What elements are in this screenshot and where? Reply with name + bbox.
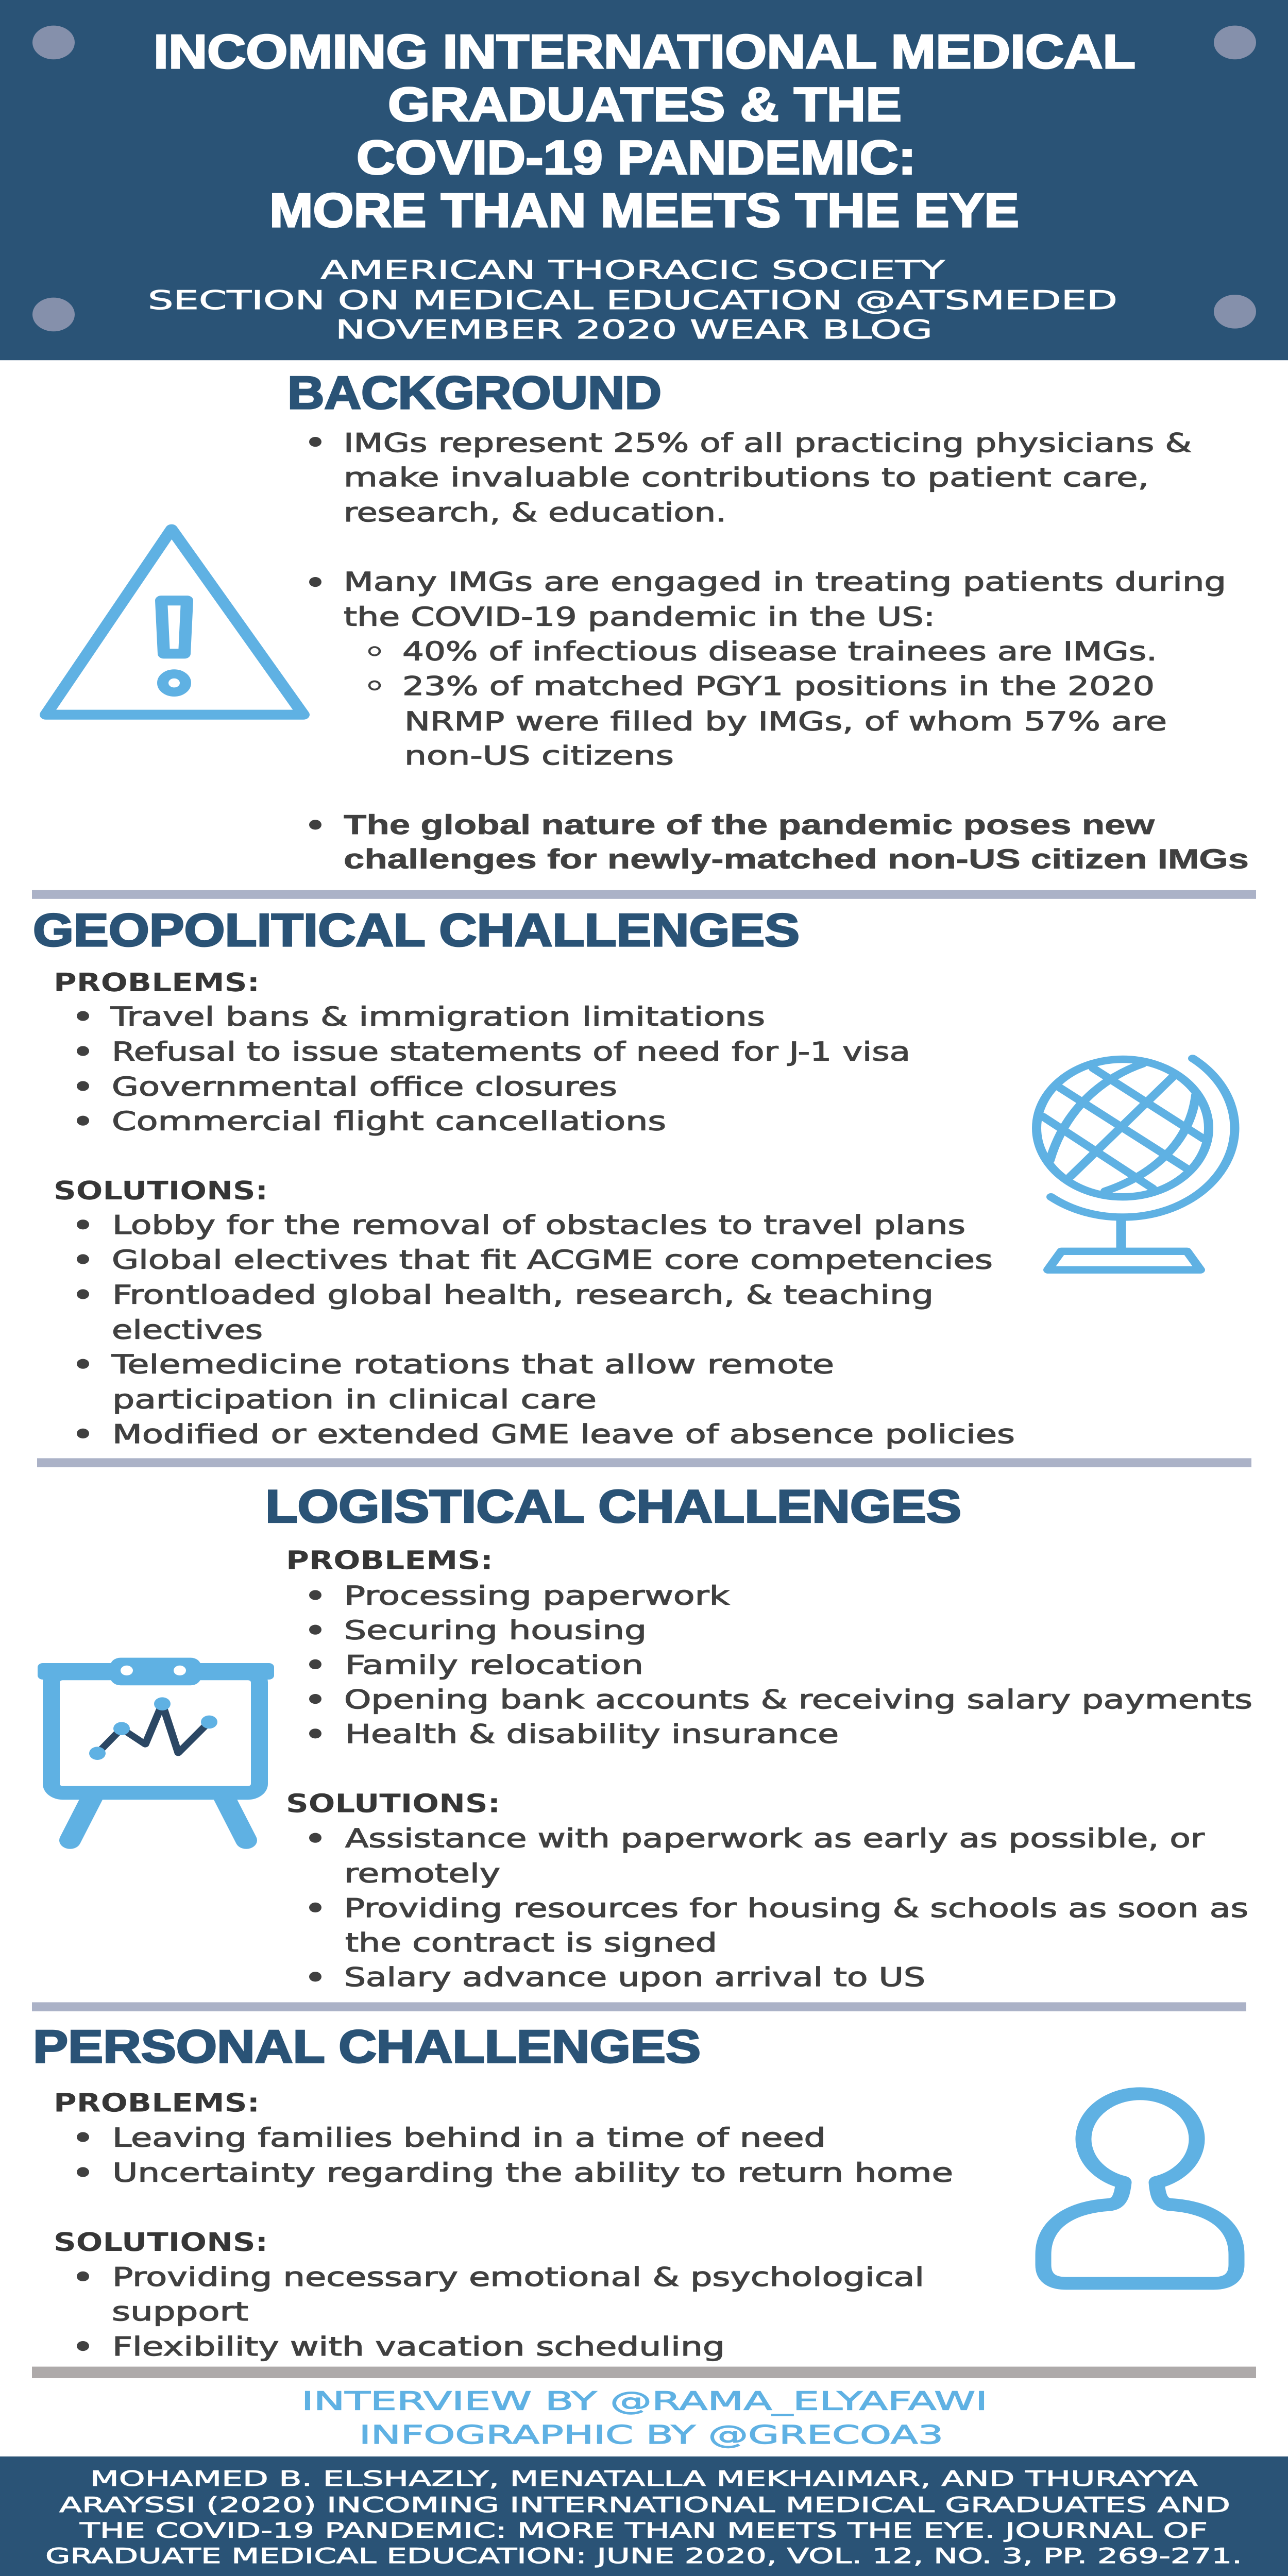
title: INCOMING INTERNATIONAL MEDICAL (154, 25, 1136, 78)
solutions list: Lobby for the removal of obstacles to travel plans (112, 1210, 965, 1240)
solutions list: Modified or extended GME leave of absence policies (112, 1419, 1015, 1449)
solutions list: SOLUTIONS: (54, 2227, 268, 2257)
solutions list: the contract is signed (345, 1928, 717, 1958)
heading: personal challenges: PERSONAL CHALLENGES (33, 2021, 701, 2072)
citation text: MOHAMED B. ELSHAZLY, MENATALLA MEKHAIMAR, AND THURAYYA (90, 2467, 1198, 2491)
problems list: Refusal to issue statements of need for J-1 visa (112, 1037, 910, 1066)
problems list: Leaving families behind in a time of need (112, 2123, 826, 2153)
solutions list (286, 1788, 1248, 1992)
text block: IMGs treating COVID-19 patients: the COVID-19 pandemic in the US: (344, 602, 935, 632)
solutions list: Providing necessary emotional & psychological (112, 2262, 924, 2292)
problems list: PROBLEMS: (54, 2088, 260, 2117)
problems list: Uncertainty regarding the ability to return home (112, 2158, 953, 2188)
solutions list: remotely (344, 1858, 500, 1889)
title: MORE THAN MEETS THE EYE (269, 183, 1019, 237)
icon: presentation board with line chart (38, 1658, 274, 1840)
problems list: PROBLEMS: (286, 1545, 493, 1575)
solutions list: Frontloaded global health, research, & teaching (112, 1280, 934, 1310)
text block: global nature of the pandemic: challenges for newly-matched non-US citizen IMGs (344, 844, 1249, 875)
solutions list (54, 2227, 924, 2362)
subtitle: NOVEMBER 2020 WEAR BLOG (335, 314, 933, 345)
heading: geopolitical challenges: GEOPOLITICAL CHALLENGES (33, 904, 800, 956)
subtitle (148, 255, 1117, 345)
solutions list: support (112, 2297, 248, 2327)
text block: IMGs treating COVID-19 patients: 40% of infectious disease trainees are IMGs. (402, 636, 1157, 667)
citation text: ARAYSSI (2020) INCOMING INTERNATIONAL MEDICAL GRADUATES AND (59, 2493, 1230, 2517)
text block: IMGs treating COVID-19 patients: non-US citizens (404, 741, 674, 771)
text block: IMGs treating COVID-19 patients: Many IMGs are engaged in treating patients during (344, 567, 1226, 597)
problems list: Governmental office closures (112, 1072, 617, 1101)
heading: logistical challenges: LOGISTICAL CHALLENGES (265, 1481, 961, 1532)
problems list: Securing housing (344, 1615, 647, 1646)
credits: INTERVIEW BY @RAMA_ELYAFAWI (301, 2386, 988, 2416)
subtitle: AMERICAN THORACIC SOCIETY (320, 255, 945, 285)
solutions list: Salary advance upon arrival to US (344, 1962, 925, 1992)
text block: IMG share of physicians: make invaluable contributions to patient care, (344, 463, 1149, 493)
subtitle: SECTION ON MEDICAL EDUCATION @ATSMEDED (148, 285, 1117, 315)
text block: IMGs treating COVID-19 patients: 23% of matched PGY1 positions in the 2020 (402, 671, 1155, 701)
panel: header banner (0, 0, 1288, 360)
title: GRADUATES & THE (388, 77, 902, 131)
heading: background: BACKGROUND (287, 367, 662, 418)
text block: IMG share of physicians (309, 428, 1192, 528)
problems list (54, 968, 910, 1137)
problems list: Processing paperwork (344, 1581, 730, 1611)
solutions list: Telemedicine rotations that allow remote (111, 1349, 834, 1380)
credits: INFOGRAPHIC BY @GRECOA3 (359, 2420, 943, 2450)
title: COVID-19 PANDEMIC: (357, 131, 916, 184)
citation text: GRADUATE MEDICAL EDUCATION: JUNE 2020, VOL. 12, NO. 3, PP. 269-271. (45, 2544, 1242, 2569)
problems list: Family relocation (345, 1650, 643, 1680)
panel: geopolitical challenges (33, 904, 1234, 1449)
solutions list: Providing resources for housing & schools as soon as (344, 1893, 1248, 1923)
icon: person outline (1043, 2094, 1236, 2283)
problems list (54, 2088, 953, 2188)
panel: background (46, 367, 1249, 875)
text block: global nature of the pandemic (309, 809, 1249, 875)
panel: logistical challenges (38, 1481, 1252, 1992)
citation text (45, 2467, 1242, 2569)
text block: IMGs treating COVID-19 patients: NRMP were filled by IMGs, of whom 57% are (404, 706, 1167, 737)
problems list: PROBLEMS: (54, 968, 260, 997)
credits (301, 2386, 988, 2450)
solutions list: SOLUTIONS: (286, 1788, 500, 1819)
title (154, 25, 1136, 237)
solutions list (54, 1176, 1015, 1449)
solutions list: Assistance with paperwork as early as possible, or (345, 1823, 1205, 1854)
panel: citation footer (0, 2456, 1288, 2576)
citation text: THE COVID-19 PANDEMIC: MORE THAN MEETS THE EYE. JOURNAL OF (79, 2519, 1208, 2543)
text block: IMGs treating COVID-19 patients (309, 567, 1226, 771)
problems list (286, 1545, 1252, 1749)
solutions list: Flexibility with vacation scheduling (112, 2332, 725, 2362)
solutions list: SOLUTIONS: (54, 1176, 268, 1206)
solutions list: participation in clinical care (112, 1384, 597, 1415)
solutions list: Global electives that fit ACGME core competencies (112, 1245, 993, 1275)
solutions list: electives (112, 1315, 263, 1345)
problems list: Travel bans & immigration limitations (110, 1002, 765, 1031)
text block: global nature of the pandemic: The global nature of the pandemic poses new (344, 809, 1155, 840)
problems list: Health & disability insurance (345, 1719, 839, 1749)
text block: IMG share of physicians: IMGs represent 25% of all practicing physicians & (344, 428, 1192, 458)
problems list: Commercial flight cancellations (112, 1106, 666, 1137)
icon: globe on stand (1037, 1058, 1234, 1270)
problems list: Opening bank accounts & receiving salary payments (344, 1685, 1252, 1715)
text block: IMG share of physicians: research, & education. (344, 498, 726, 528)
panel: personal challenges (33, 2021, 1236, 2362)
decorative corner dots (32, 26, 1256, 331)
icon: warning triangle (46, 529, 303, 715)
